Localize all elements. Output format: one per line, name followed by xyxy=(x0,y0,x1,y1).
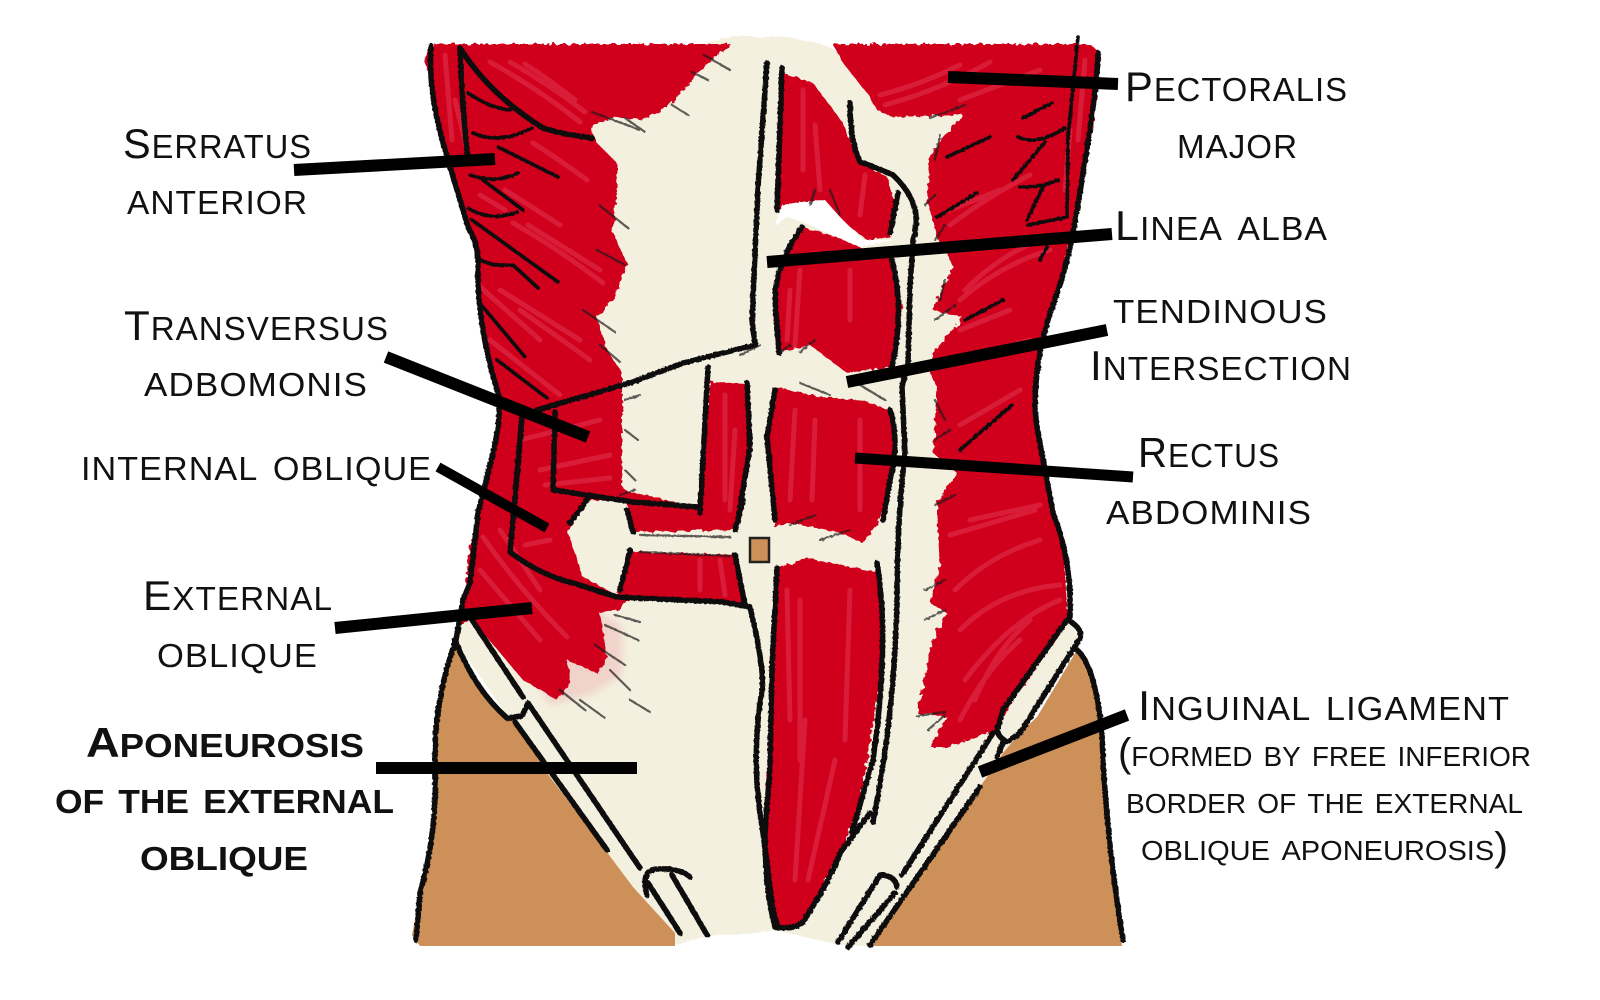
muscle fibre highlights xyxy=(445,55,1085,880)
right torso outline xyxy=(1035,53,1123,940)
label: Aponeurosis of the external oblique: of the external xyxy=(55,770,394,823)
label: Pectoralis major: major xyxy=(1177,115,1298,168)
label: Inguinal ligament with note: Inguinal ligament xyxy=(1138,677,1510,730)
leader line: Rectus abdominis xyxy=(855,458,1133,477)
label: External oblique: oblique xyxy=(157,624,318,677)
leader line: Aponeurosis xyxy=(376,762,637,774)
linea alba and left box lines xyxy=(510,63,778,928)
label: internal oblique: internal oblique xyxy=(81,437,432,490)
label: Aponeurosis of the external oblique: oblique xyxy=(140,827,308,880)
leader line: Inguinal ligament xyxy=(980,715,1127,772)
label: Aponeurosis of the external oblique: Aponeurosis xyxy=(86,714,364,767)
label: Pectoralis major xyxy=(1125,58,1348,168)
left torso outline xyxy=(416,46,499,940)
leader line: Linea alba xyxy=(767,234,1112,262)
label: Transversus abdominis: Transversus xyxy=(124,297,389,350)
leader line: internal oblique xyxy=(438,467,547,528)
label: Inguinal ligament with note xyxy=(1118,677,1531,869)
label: Inguinal ligament with note: oblique aponeurosis) xyxy=(1141,825,1508,869)
leader line: Pectoralis major xyxy=(948,77,1118,84)
muscle: left external oblique, serratus and pectoralis xyxy=(425,44,731,700)
white gap between rectus segments xyxy=(775,200,893,247)
muscle: right external oblique and pectoralis xyxy=(833,44,1100,747)
leader line: External oblique xyxy=(335,608,532,628)
label: External oblique xyxy=(143,567,333,677)
leader line: Serratus anterior xyxy=(294,159,495,170)
fine hatch marks along aponeurosis edge xyxy=(560,55,965,730)
sketch outlines xyxy=(416,37,1123,947)
label: Linea alba: Linea alba xyxy=(1115,197,1328,250)
label: Inguinal ligament with note: (formed by free inferior xyxy=(1118,731,1531,775)
muscle: left rectus upper and lower segments xyxy=(617,382,750,605)
rectus sheath lines xyxy=(570,68,916,928)
label: External oblique: External xyxy=(143,567,333,620)
hip skin: left xyxy=(412,640,675,946)
label: Pectoralis major: Pectoralis xyxy=(1125,58,1348,111)
label: Rectus abdominis xyxy=(1106,424,1312,534)
left chest border line xyxy=(460,48,592,153)
leader line: tendinous intersection xyxy=(847,330,1107,382)
label: Serratus anterior xyxy=(123,115,312,224)
label: Rectus abdominis: abdominis xyxy=(1106,481,1312,534)
label: Rectus abdominis: Rectus xyxy=(1138,424,1280,477)
label: Serratus anterior: anterior xyxy=(127,171,308,224)
label: tendinous Intersection: Intersection xyxy=(1090,337,1352,390)
navel xyxy=(750,538,769,562)
label: Transversus abdominis: adbomonis xyxy=(144,353,368,406)
left inguinal ligament lines xyxy=(455,620,707,935)
right chest and serratus marks xyxy=(937,37,1078,450)
label: Inguinal ligament with note: border of the external xyxy=(1126,778,1523,822)
muscle: right rectus abdominis segments xyxy=(763,73,902,928)
left serratus marks xyxy=(468,93,558,398)
aponeurosis cream torso base xyxy=(455,36,1080,946)
speckled pink fringe around lower oblique xyxy=(535,610,622,705)
label: tendinous Intersection: tendinous xyxy=(1113,280,1328,333)
label: Aponeurosis of the external oblique xyxy=(55,714,394,880)
hip skin: right xyxy=(870,650,1122,946)
right inguinal ligament lines xyxy=(838,620,1081,947)
label: tendinous Intersection xyxy=(1090,280,1352,390)
leader line: Transversus abdominis xyxy=(386,357,588,437)
label: Transversus abdominis xyxy=(124,297,389,406)
label: Serratus anterior: Serratus xyxy=(123,115,312,168)
